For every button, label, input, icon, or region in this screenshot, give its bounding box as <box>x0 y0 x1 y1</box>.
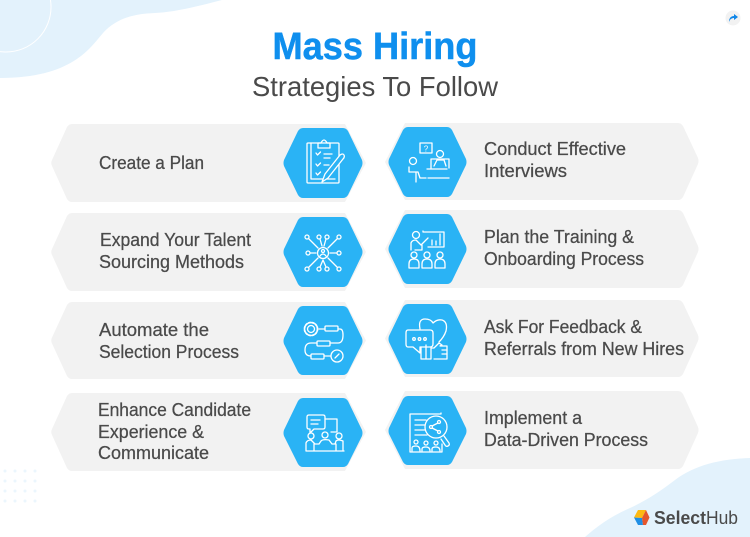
icon: network sourcing <box>305 235 341 271</box>
icon: clipboard checklist <box>307 140 344 183</box>
panel: Ask For Feedback & Referrals from New Hires <box>385 300 698 377</box>
icon: feedback <box>406 319 447 359</box>
icon: data analysis <box>410 413 449 452</box>
panel: Create a Plan: Create a Plan <box>99 153 204 173</box>
panel: Enhance Candidate Experience & Communicate: Enhance Candidate <box>98 400 251 420</box>
logo: SelectHub <box>634 508 738 528</box>
panel: Create a Plan <box>51 124 366 202</box>
subtitle: Strategies To Follow <box>252 71 499 102</box>
icon: interview <box>409 143 449 182</box>
icon: logo hexagon <box>634 510 650 525</box>
panel: Enhance Candidate Experience & Communicate <box>51 393 366 471</box>
panel: Plan the Training & Onboarding Process: Plan the Training & <box>484 227 634 247</box>
icon: communication <box>306 415 344 451</box>
panel: Implement a Data-Driven Process <box>385 391 698 469</box>
panel: Enhance Candidate Experience & Communicate: Experience & <box>98 422 204 442</box>
panel: Expand Your Talent Sourcing Methods: Sourcing Methods <box>99 252 244 272</box>
background blob: top left <box>0 0 222 78</box>
panel: Ask For Feedback & Referrals from New Hires: Ask For Feedback & <box>484 317 642 337</box>
panel: Ask For Feedback & Referrals from New Hires: Referrals from New Hires <box>484 339 684 359</box>
panel: Conduct Effective Interviews: Interviews <box>484 161 567 181</box>
logo: SelectHub: Select <box>654 508 706 528</box>
panel: Implement a Data-Driven Process: Data-Driven Process <box>484 430 648 450</box>
icon: interview: ? <box>424 144 429 154</box>
panel: Plan the Training & Onboarding Process: Onboarding Process <box>484 249 644 269</box>
dot grid decoration <box>4 470 36 502</box>
panel: Enhance Candidate Experience & Communicate: Communicate <box>98 443 209 463</box>
panel: Automate the Selection Process: Automate the <box>99 320 209 340</box>
background blob: bottom right <box>585 458 750 537</box>
panel: Automate the Selection Process: Selection Process <box>99 342 239 362</box>
icon: training <box>409 231 445 268</box>
panel: Automate the Selection Process <box>51 302 366 379</box>
icon: automation flow <box>304 322 343 362</box>
title: Mass Hiring <box>272 26 478 68</box>
panel: Conduct Effective Interviews: Conduct Effective <box>484 139 626 159</box>
panel: Expand Your Talent Sourcing Methods: Expand Your Talent <box>100 230 251 250</box>
logo: SelectHub: Hub <box>706 508 738 528</box>
panel: Expand Your Talent Sourcing Methods <box>51 213 366 291</box>
panel: Implement a Data-Driven Process: Implement a <box>484 408 583 428</box>
panel: Conduct Effective Interviews <box>385 123 698 200</box>
panel: Plan the Training & Onboarding Process <box>385 210 698 288</box>
share icon <box>726 10 740 26</box>
